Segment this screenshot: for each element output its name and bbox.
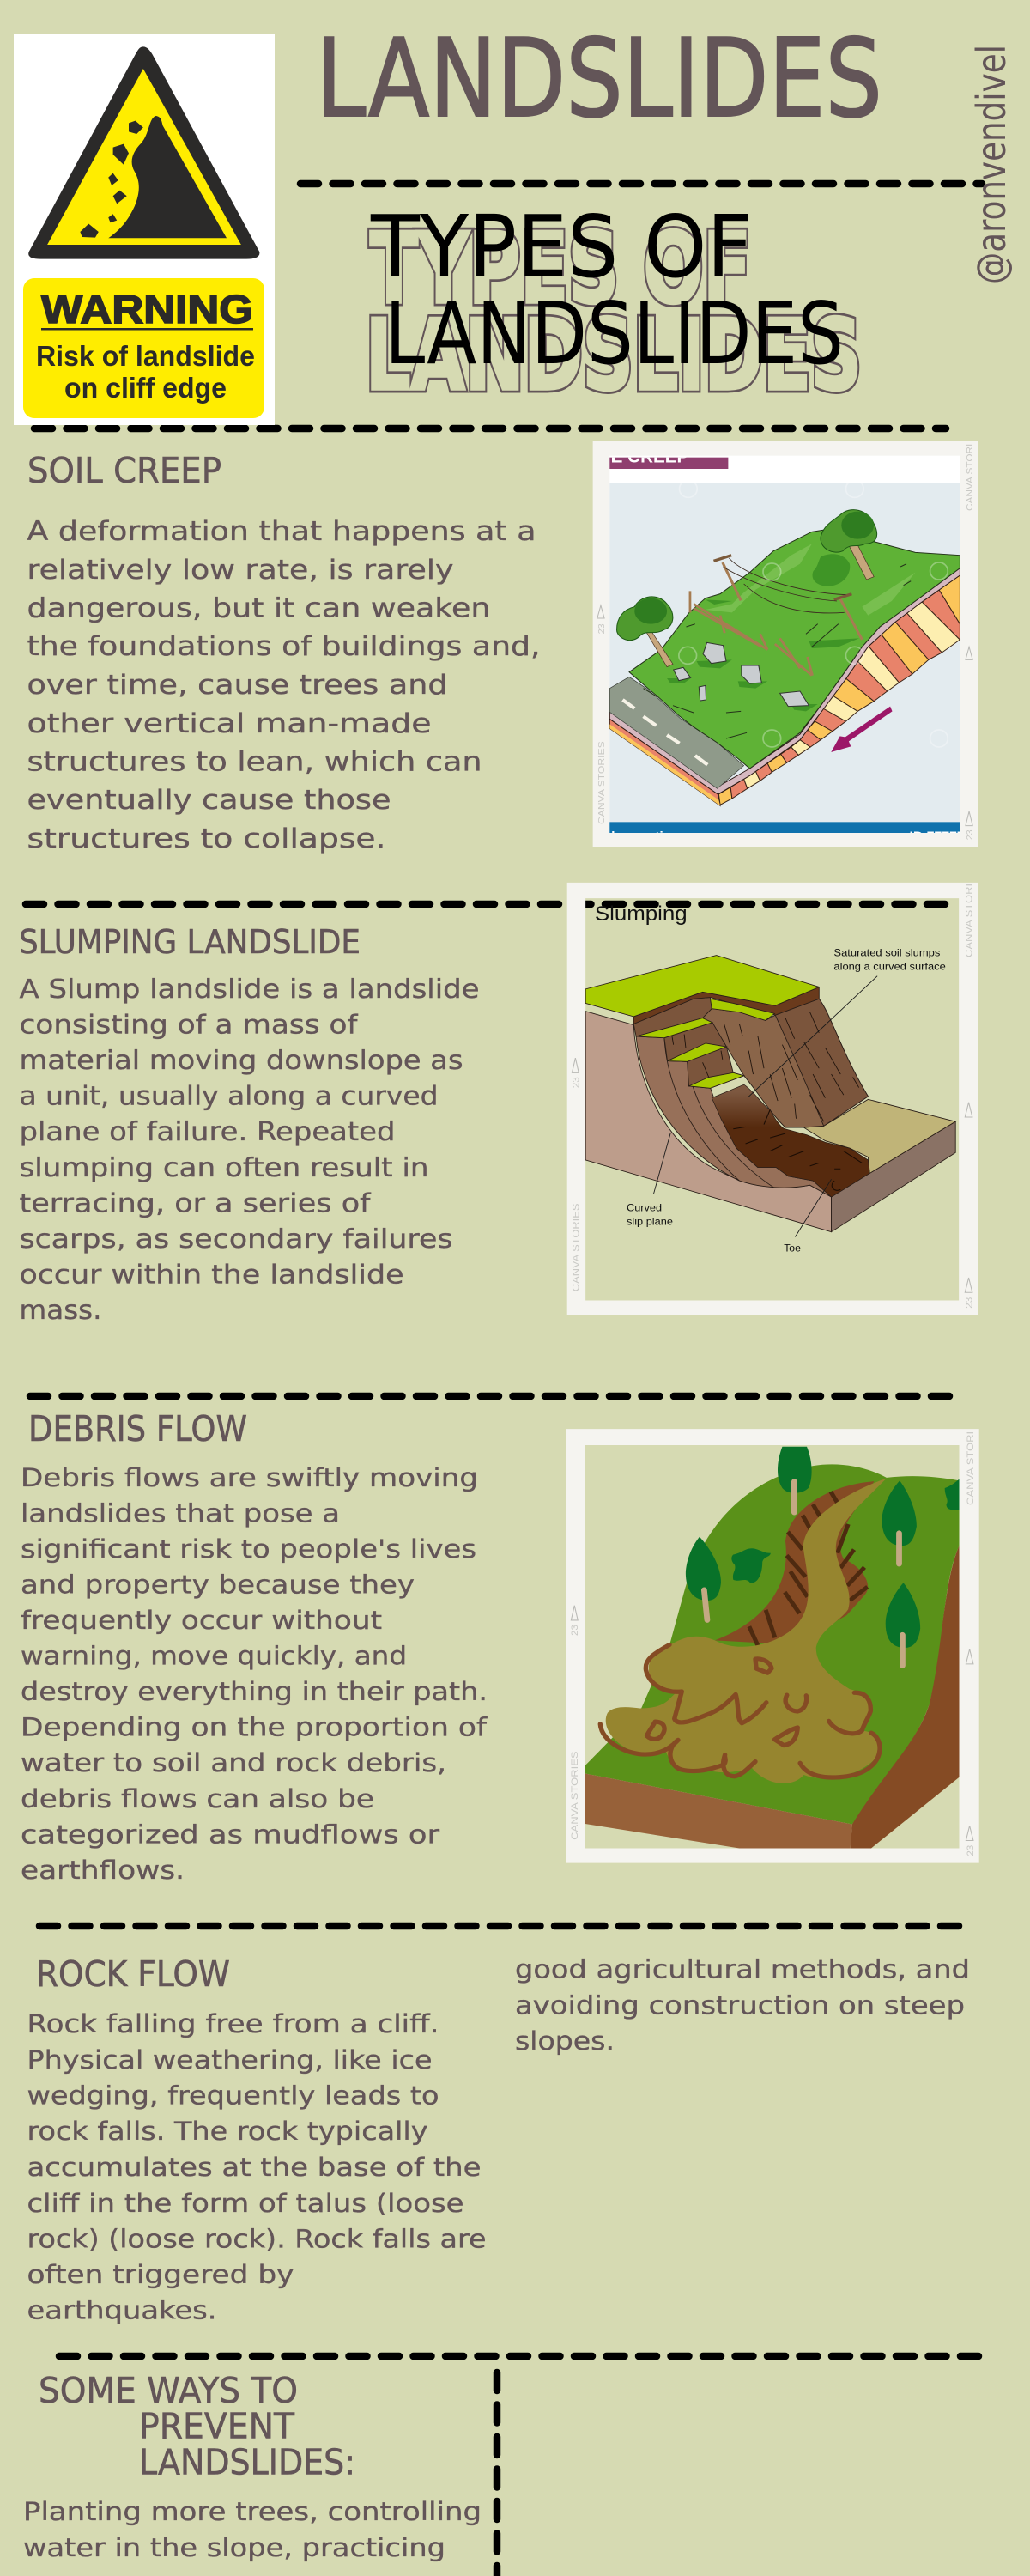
text: prevention continued column: slopes. [515, 2026, 615, 2056]
text: debris flow description: destroy everything in their path. [21, 1677, 488, 1706]
frame labels: 23 [966, 1845, 976, 1856]
icon: falling rocks triangle [28, 46, 259, 259]
frame labels [597, 444, 975, 840]
text: debris flow description [21, 1463, 488, 1885]
left tree [617, 597, 673, 667]
heading: some ways to prevent landslides [39, 2370, 355, 2483]
frame labels: 23 [966, 829, 975, 840]
right soil face [851, 1546, 959, 1848]
heading: rock flow: ROCK FLOW [36, 1953, 230, 1995]
illustration: slumping diagram [567, 883, 978, 1315]
text: debris flow description: Depending on the proportion of [21, 1712, 488, 1741]
illustration: soil creep [593, 441, 978, 847]
scarp cliff [633, 998, 868, 1127]
text: prevention continued column [515, 1954, 970, 2056]
exposed gully [715, 1481, 875, 1645]
text: rock flow description: rock) (loose rock). Rock falls are [27, 2224, 486, 2253]
warning label panel: on cliff edge [64, 372, 227, 404]
heading: types of landslides: LANDSLIDES [385, 283, 844, 384]
text: soil creep description: the foundations of buildings and, [27, 631, 541, 662]
text: debris flow description: and property because they [21, 1570, 415, 1599]
heading: some ways to prevent landslides: LANDSLIDES: [139, 2442, 355, 2483]
text: soil creep description: over time, cause trees and [27, 670, 448, 701]
text: debris flow description: categorized as mudflows or [21, 1820, 439, 1850]
text: soil creep description: dangerous, but it can weaken [27, 592, 491, 623]
text: rock flow description: earthquakes. [27, 2296, 216, 2325]
text: soil creep description: relatively low rate, is rarely [27, 555, 453, 586]
text: slumping description [19, 975, 479, 1326]
text: slumping description: a unit, usually along a curved [19, 1082, 438, 1111]
front soil face [585, 1773, 852, 1848]
text: slumping description: occur within the landslide [19, 1261, 403, 1290]
warning sign [14, 34, 275, 425]
illustration: soil creep: dreamstime.com [607, 830, 715, 844]
grass surface [585, 956, 819, 1017]
frame labels: CANVA STORI [966, 444, 975, 511]
text: soil creep description: eventually cause those [27, 785, 391, 816]
frame labels: CANVA STORIES [570, 1751, 580, 1840]
bedrock right face [832, 1121, 955, 1232]
illustration: debris flow [566, 1429, 979, 1863]
title: LANDSLIDES [316, 15, 882, 142]
frame labels: 23 [570, 1625, 580, 1636]
road [609, 677, 744, 788]
frame labels [571, 884, 975, 1309]
sand flat [803, 1099, 955, 1173]
frame labels: CANVA STORIES [571, 1204, 582, 1291]
text: rock flow description [27, 2009, 486, 2325]
text: soil creep description: structures to collapse. [27, 823, 386, 854]
frame labels [570, 1431, 976, 1856]
text: soil creep description: structures to lean, which can [27, 747, 482, 778]
diagram labels: along a curved surface [833, 961, 946, 972]
text: slumping description: terracing, or a series of [19, 1188, 372, 1219]
text: prevention description: water in the slope, practicing [23, 2533, 445, 2562]
debris flow mass [606, 1479, 887, 1783]
text: debris flow description: Debris flows are swiftly moving [21, 1463, 478, 1492]
frame labels: 23 [597, 623, 607, 634]
road strata [609, 715, 720, 805]
bedrock left face [585, 1012, 832, 1232]
text: debris flow description: earthflows. [21, 1856, 185, 1885]
diagram labels: Saturated soil slumps [833, 947, 940, 958]
tree trunks [704, 1481, 902, 1666]
text: slumping description: slumping can often result in [19, 1153, 429, 1183]
hillside grass [585, 1464, 959, 1825]
lavender subsoil band [609, 568, 960, 794]
frame labels: CANVA STORIES [597, 741, 607, 824]
heading: types of landslides: TYPES OF [370, 212, 751, 325]
layered rock strata [718, 575, 960, 805]
scarp rim [633, 987, 819, 1024]
text: rock flow description: rock falls. The rock typically [27, 2117, 427, 2146]
heading: types of landslides: LANDSLIDES [366, 299, 862, 412]
heading: soil creep: SOIL CREEP [27, 450, 221, 491]
text: soil creep description: other vertical man-made [27, 708, 431, 739]
text: slumping description: A Slump landslide is a landslide [19, 975, 479, 1005]
diagram labels: slip plane [627, 1216, 673, 1228]
text: slumping description: mass. [19, 1296, 102, 1326]
heading: some ways to prevent landslides: PREVENT [139, 2406, 295, 2447]
diagram labels: Curved [627, 1202, 662, 1213]
frame labels: 23 [571, 1077, 582, 1088]
illustration: soil creep: E CREEP [611, 448, 688, 466]
grass [629, 530, 960, 769]
warning label panel: WARNING [41, 287, 253, 331]
text: debris flow description: significant risk to people's lives [21, 1534, 476, 1564]
heading: types of landslides: TYPES OF [370, 212, 751, 325]
text: prevention continued column: good agricultural methods, and [515, 1954, 970, 1984]
leader lines [653, 976, 877, 1236]
diagram labels: Toe [784, 1242, 801, 1255]
arrow: downslope movement [831, 707, 893, 752]
text: rock flow description: cliff in the form of talus (loose [27, 2189, 464, 2218]
text: rock flow description: Physical weathering, like ice [27, 2045, 433, 2075]
text: rock flow description: wedging, frequently leads to [27, 2081, 439, 2111]
text: debris flow description: water to soil and rock debris, [21, 1748, 446, 1777]
text: slumping description: scarps, as secondary failures [19, 1224, 453, 1255]
gravestone rocks [674, 642, 809, 707]
text: prevention description [23, 2497, 482, 2562]
text: soil creep description: A deformation that happens at a [27, 516, 536, 547]
fallen fence [690, 591, 813, 676]
trees [686, 1447, 959, 1648]
text: rock flow description: Rock falling free from a cliff. [27, 2009, 439, 2038]
grass terraces [636, 999, 774, 1088]
warning label panel: Risk of landslide [36, 340, 255, 372]
text: soil creep description [27, 516, 541, 854]
gully stripes [749, 1492, 868, 1645]
text: slumping description: consisting of a mass of [19, 1010, 359, 1041]
frame labels: 23 [964, 1297, 975, 1309]
heading: slumping landslide: SLUMPING LANDSLIDE [19, 923, 360, 961]
text: slumping description: material moving downslope as [19, 1046, 464, 1076]
diagram labels [595, 902, 946, 1255]
frame labels: CANVA STORI [964, 884, 975, 957]
diagram labels: Slumping [595, 902, 688, 926]
debris toe [712, 1084, 869, 1197]
illustration: soil creep: ID 777777 [909, 830, 972, 844]
frame labels: CANVA STORI [966, 1431, 976, 1505]
text: prevention description: Planting more trees, controlling [23, 2497, 482, 2526]
warning label panel [23, 278, 264, 418]
text: rock flow description: accumulates at the base of the [27, 2153, 481, 2182]
slip blocks [636, 1036, 832, 1197]
right tree [821, 510, 877, 580]
heading: some ways to prevent landslides: SOME WAYS TO [39, 2370, 298, 2411]
text: prevention continued column: avoiding construction on steep [515, 1990, 965, 2020]
text: slumping description: plane of failure. Repeated [19, 1117, 395, 1147]
text: rock flow description: often triggered by [27, 2260, 294, 2289]
heading: debris flow: DEBRIS FLOW [28, 1408, 247, 1449]
utility poles and wires [714, 556, 862, 640]
text: debris flow description: warning, move quickly, and [21, 1642, 407, 1671]
text: debris flow description: debris flows can also be [21, 1784, 374, 1814]
watermark swirls [679, 480, 948, 747]
heading: types of landslides: TYPES OF [370, 197, 753, 297]
text: debris flow description: frequently occur without [21, 1606, 382, 1635]
heading: types of landslides: LANDSLIDES [366, 299, 862, 412]
text: debris flow description: landslides that pose a [21, 1499, 340, 1528]
heading: types of landslides [366, 197, 862, 412]
debris outlines [600, 1645, 880, 1777]
